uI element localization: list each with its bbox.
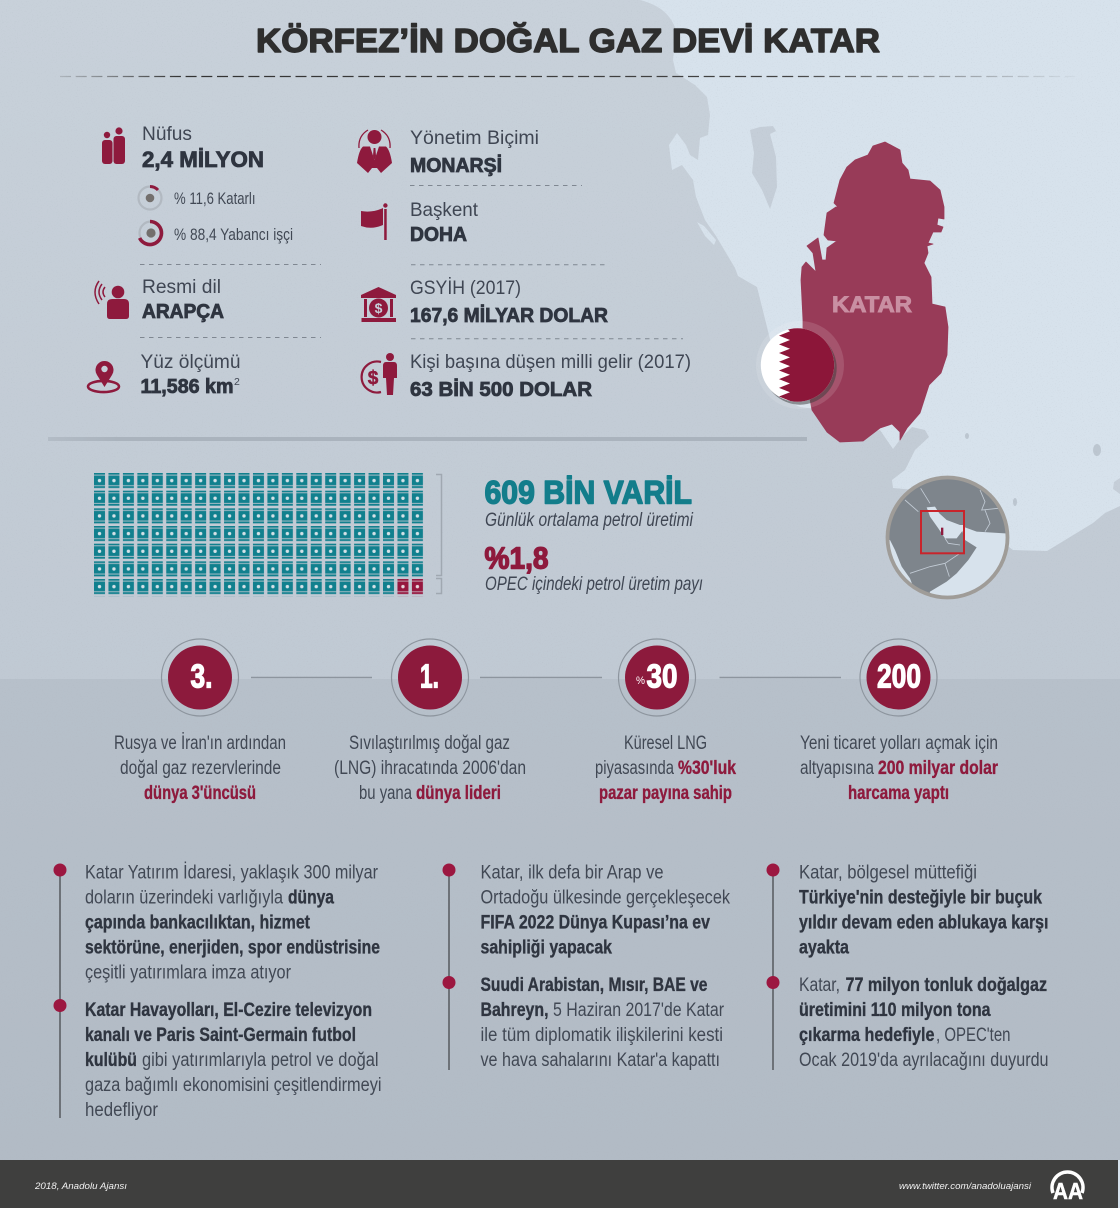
highlight: LNG export leader: Sıvılaştırılmış doğal gaz <box>349 733 510 754</box>
text column 3: Türkiye'nin desteğiyle bir buçuk <box>799 888 1042 908</box>
title: KÖRFEZ’İN DOĞAL GAZ DEVİ KATAR <box>256 22 880 60</box>
fact: population: 2,4 MİLYON <box>142 147 264 172</box>
highlight: trade routes investment: altyapısına <box>800 758 874 779</box>
highlight: LNG market share: 30 <box>646 658 678 694</box>
highlight: third in reserves: doğal gaz rezervlerinde <box>120 758 281 779</box>
highlight: trade routes investment: 200 <box>877 658 921 694</box>
footer credit: 2018, Anadolu Ajansı <box>34 1181 127 1192</box>
text column 1: kanalı ve Paris Saint-Germain futbol <box>85 1025 356 1046</box>
text column 1: gibi yatırımlarıyla petrol ve doğal <box>142 1050 378 1071</box>
text column 2: ile tüm diplomatik ilişkilerini kesti <box>480 1025 723 1046</box>
fact: income per capita: Kişi başına düşen milli gelir (2017) <box>410 351 691 373</box>
text column 1: kulübü <box>85 1050 137 1071</box>
text column 3: üretimini 110 milyon tona <box>799 1000 991 1021</box>
highlight: LNG market share: % <box>636 675 645 687</box>
text column 2: FIFA 2022 Dünya Kupası’na ev <box>480 912 710 934</box>
highlight: LNG market share: %30'luk <box>678 758 736 779</box>
icon: Qatar flag <box>756 321 844 409</box>
footer link: www.twitter.com/anadoluajansi <box>899 1181 1032 1192</box>
map label: KATAR: KATAR <box>832 292 912 317</box>
highlight: third in reserves: dünya 3'üncüsü <box>144 783 256 804</box>
fact: area <box>88 351 240 398</box>
donut: 11.6 percent <box>138 186 162 210</box>
text column 2 <box>442 862 730 1071</box>
highlight: trade routes investment: Yeni ticaret yolları açmak için <box>800 733 998 754</box>
text column 1: doların üzerindeki varlığıyla <box>85 888 283 908</box>
fact: income per capita: 63 BİN 500 DOLAR <box>410 378 593 401</box>
text column 1: Katar Yatırım İdaresi, yaklaşık 300 milyar <box>85 862 379 884</box>
highlight: LNG export leader: bu yana <box>359 783 412 804</box>
text column 3: çıkarma hedefiyle <box>799 1025 934 1046</box>
fact: GDP: 167,6 MİLYAR DOLAR <box>410 304 609 327</box>
text column 1: dünya <box>288 888 334 908</box>
highlight: trade routes investment: harcama yaptı <box>848 783 949 804</box>
fact: official language: Resmi dil <box>142 276 221 298</box>
text column 2: Katar, ilk defa bir Arap ve <box>480 862 664 884</box>
highlight: LNG export leader: 1. <box>420 658 439 694</box>
text column 3: 77 milyon tonluk doğalgaz <box>846 975 1047 996</box>
text column 1: Katar Havayolları, El-Cezire televizyon <box>85 1000 372 1021</box>
text column 1: çeşitli yatırımlara imza atıyor <box>85 962 292 984</box>
stat: daily oil production <box>484 474 694 531</box>
icon: people <box>102 127 125 164</box>
text column 2: ve hava sahalarını Katar'a kapattı <box>480 1050 720 1071</box>
highlight: trade routes investment <box>800 639 998 804</box>
fact: population <box>102 123 293 244</box>
text column 2: Suudi Arabistan, Mısır, BAE ve <box>480 975 708 996</box>
text column 3: yıldır devam eden ablukaya karşı <box>799 912 1048 934</box>
connector lines <box>251 676 841 678</box>
stat: daily oil production: 609 BİN VARİL <box>484 474 692 510</box>
fact: GDP <box>361 276 609 327</box>
lower band background <box>0 679 1120 1160</box>
logo: AA: AA <box>1053 1178 1083 1204</box>
fact: government: MONARŞİ <box>410 154 502 177</box>
fact: government <box>357 127 539 177</box>
highlight: LNG market share: pazar payına sahip <box>599 783 732 804</box>
icon: bank <box>361 287 396 322</box>
icon: location pin <box>88 361 119 392</box>
text column 2: 5 Haziran 2017'de Katar <box>553 1000 725 1021</box>
text column 1: hedefliyor <box>85 1100 159 1121</box>
donut: 88.4 percent <box>140 222 162 244</box>
fact: area: 2 <box>234 376 240 388</box>
fact: official language <box>95 276 224 323</box>
section divider <box>48 437 807 441</box>
fact: official language: ARAPÇA <box>142 301 224 323</box>
highlight: LNG market share: Küresel LNG <box>624 733 707 754</box>
fact: GDP: GSYİH (2017) <box>410 276 521 299</box>
highlight: trade routes investment: 200 milyar dolar <box>878 758 998 779</box>
fact: government: Yönetim Biçimi <box>410 127 539 149</box>
highlight: LNG market share: piyasasında <box>595 758 674 779</box>
text column 1: gaza bağımlı ekonomisini çeşitlendirmeyi <box>85 1075 382 1096</box>
fact: population: % 88,4 Yabancı işçi <box>174 225 293 244</box>
icon: speaking person <box>95 281 129 319</box>
fact: population: Nüfus <box>142 123 192 145</box>
highlight: LNG export leader: (LNG) ihracatında 2006'dan <box>334 758 526 779</box>
stat: OPEC share: OPEC içindeki petrol üretim payı <box>485 574 703 595</box>
icon: income person: $ <box>368 368 379 389</box>
text column 3: Ocak 2019'da ayrılacağını duyurdu <box>799 1050 1048 1071</box>
map: sea and surrounding shape <box>0 0 1120 700</box>
text column 3: ayakta <box>799 938 849 958</box>
highlight: third in reserves: Rusya ve İran'ın ardından <box>114 733 286 754</box>
text column 2: Bahreyn, <box>480 1000 548 1021</box>
highlight: LNG market share <box>595 639 736 804</box>
text column 2: Ortadoğu ülkesinde gerçekleşecek <box>480 888 730 908</box>
text column 3 <box>766 862 1048 1071</box>
text column 3: Katar, bölgesel müttefiği <box>799 862 977 884</box>
title dashed rule <box>60 76 1075 78</box>
fact: income per capita <box>362 351 691 401</box>
icon: manager <box>357 130 392 173</box>
icon: income person <box>362 353 397 395</box>
icon: bank: $ <box>375 300 383 316</box>
text column 3: Katar, <box>799 975 840 996</box>
fact: capital <box>361 199 479 246</box>
locator mini map <box>886 476 1010 600</box>
fact: population: % 11,6 Katarlı <box>174 189 256 208</box>
highlight: LNG export leader: dünya lideri <box>416 783 501 804</box>
stat: daily oil production: Günlük ortalama petrol üretimi <box>485 510 694 531</box>
fact: capital: Başkent <box>410 199 479 221</box>
stat: OPEC share: %1,8 <box>484 540 548 576</box>
icon: flag <box>361 203 388 240</box>
map: Qatar <box>801 142 948 442</box>
fact: area: Yüz ölçümü <box>140 351 240 373</box>
footer bar <box>0 1160 1118 1208</box>
highlight: LNG export leader <box>334 639 526 804</box>
text column 1: sektörüne, enerjiden, spor endüstrisine <box>85 938 380 958</box>
fact: area: 11,586 km <box>140 376 234 398</box>
highlight: third in reserves <box>114 639 286 804</box>
text column 3: , OPEC'ten <box>936 1025 1010 1046</box>
text column 1 <box>54 862 382 1121</box>
fact: capital: DOHA <box>410 224 467 246</box>
brackets <box>436 474 442 594</box>
pictogram: oil barrels <box>94 473 425 597</box>
stat: OPEC share <box>484 540 703 595</box>
text column 1: çapında bankacılıktan, hizmet <box>85 912 311 934</box>
text column 2: sahipliği yapacak <box>480 938 612 958</box>
highlight: third in reserves: 3. <box>190 658 212 694</box>
